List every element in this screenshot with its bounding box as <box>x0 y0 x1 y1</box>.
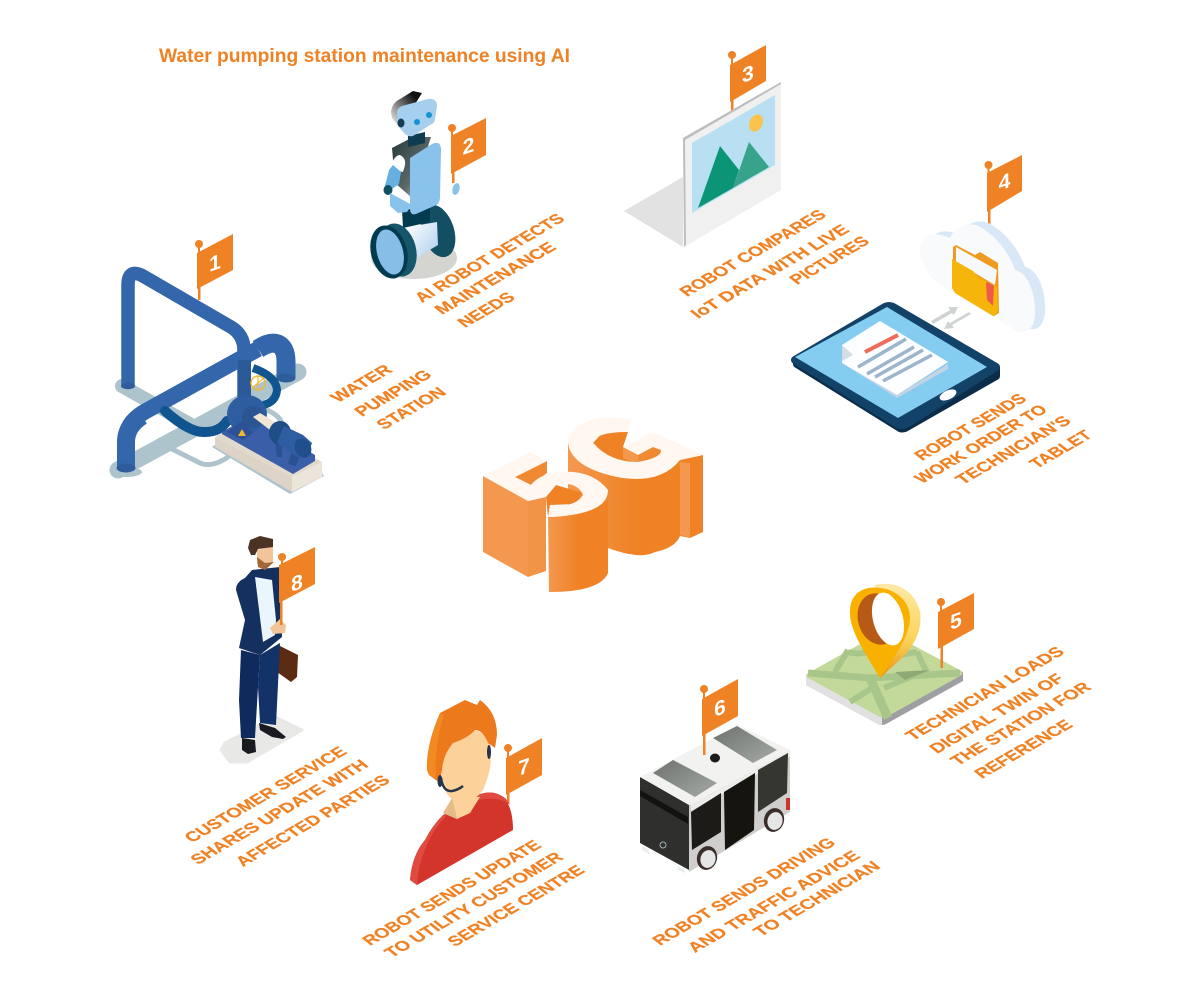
label: robot sends work order: TECHNICIAN'S <box>951 413 1075 487</box>
flag 3 <box>728 45 766 111</box>
label: customer service: CUSTOMER SERVICE <box>180 744 351 845</box>
label: water pumping station: PUMPING <box>350 367 436 419</box>
flag 6 <box>700 679 738 755</box>
illustration: AI robot <box>365 91 462 283</box>
illustration: picture frame <box>624 82 781 247</box>
flag 6: 6 <box>714 694 726 722</box>
label: water pumping station: STATION <box>372 384 450 432</box>
illustration: customer service agent <box>410 700 513 885</box>
label: robot sends driving advice: TO TECHNICIAN <box>749 858 884 939</box>
label: robot sends update: TO UTILITY CUSTOMER <box>380 849 567 960</box>
flag 3: 3 <box>742 60 754 88</box>
pipes <box>126 273 286 468</box>
label: water pumping station: WATER <box>326 362 397 405</box>
label: AI robot: AI ROBOT DETECTS <box>410 211 569 305</box>
flag 8: 8 <box>291 569 303 597</box>
pump base <box>215 437 292 492</box>
title: Water pumping station maintenance using AI <box>159 46 570 67</box>
illustration: customer service person <box>221 536 302 762</box>
label: robot sends update: SERVICE CENTRE <box>443 862 589 949</box>
flag 8 <box>221 536 315 762</box>
label: customer service: AFFECTED PARTIES <box>231 772 394 869</box>
illustration: 5G logo <box>483 417 703 592</box>
label: robot sends update: ROBOT SENDS UPDATE <box>358 837 545 948</box>
label: robot sends work order <box>910 391 1097 487</box>
flag 4 <box>984 155 1022 226</box>
label: robot compares: ROBOT COMPARES <box>675 207 830 299</box>
icon: transfer arrows <box>931 307 971 329</box>
label: robot compares: IoT DATA WITH LIVE <box>686 222 854 321</box>
flag 5 <box>937 593 974 668</box>
label: technician loads digital twin: THE STATION FOR <box>946 679 1095 768</box>
flag 2: 2 <box>463 132 474 160</box>
pump body <box>238 360 251 404</box>
label: robot compares: PICTURES <box>785 233 874 287</box>
label: technician loads digital twin: TECHNICIAN LOADS <box>901 644 1069 743</box>
label: technician loads digital twin: DIGITAL TWIN OF <box>925 671 1068 756</box>
flag 7 <box>504 738 542 804</box>
flag 5: 5 <box>950 607 962 635</box>
flag 4: 4 <box>999 168 1010 196</box>
label: water pumping station <box>326 362 450 432</box>
label: technician loads digital twin: REFERENCE <box>970 717 1077 781</box>
illustration: cloud with folder <box>920 221 1045 332</box>
label: robot sends work order: TABLET <box>1025 427 1097 471</box>
illustration: digital map with pin <box>806 584 963 725</box>
illustration: autonomous bus <box>640 725 790 873</box>
flag 1: 1 <box>209 249 221 277</box>
illustration: water pumping station <box>110 273 324 494</box>
label: robot sends driving advice: ROBOT SENDS DRIVING <box>648 835 840 948</box>
illustration: tablet <box>795 306 996 428</box>
label: robot sends work order: ROBOT SENDS <box>910 391 1031 463</box>
label: AI robot: NEEDS <box>453 289 519 330</box>
flag 2 <box>448 118 486 183</box>
label: robot sends work order: WORK ORDER TO <box>910 402 1052 486</box>
flag 7: 7 <box>518 753 530 781</box>
label: technician loads digital twin <box>901 644 1095 781</box>
valve wheel <box>251 376 265 390</box>
label: AI robot: MAINTENANCE <box>430 239 560 317</box>
label: robot compares <box>675 207 874 321</box>
flag 1 <box>195 234 233 300</box>
label: customer service: SHARES UPDATE WITH <box>186 757 373 867</box>
pump shadows <box>118 372 298 470</box>
label: robot sends driving advice: AND TRAFFIC ADVICE <box>683 848 864 955</box>
